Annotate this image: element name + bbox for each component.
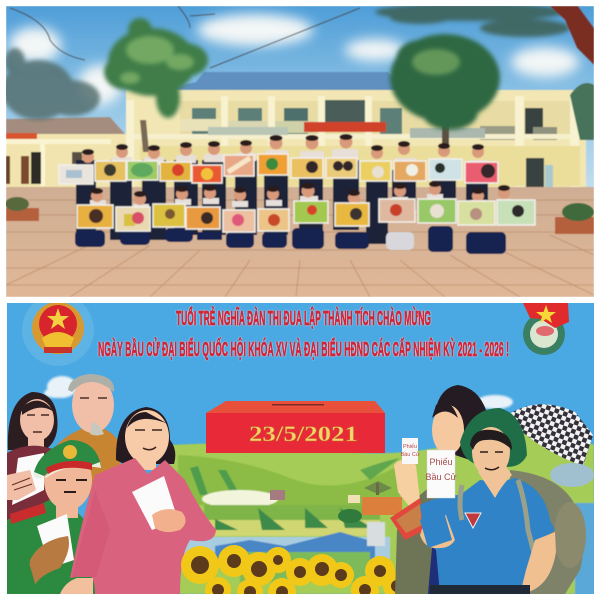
left green tree [104,18,208,152]
ballot box with date [206,401,385,453]
kneeling painting details [89,204,524,226]
kneeling students row [75,181,511,254]
sky with clouds [6,6,594,196]
figure: young man in blue shirt with green hat [420,408,556,594]
planter boxes [5,197,594,234]
date: 23/5/2021 [249,421,358,446]
figure: young woman with ballot [390,385,486,594]
figure: woman on the left [7,392,58,530]
figure: old man [50,374,120,495]
sunflowers left group [181,545,354,594]
standing row paintings [59,154,498,184]
upper right canopy and red trunk [375,3,594,140]
checkered flag [511,404,593,466]
figure: young man in blue shirt with green hat: Bầu Cử [425,472,457,482]
school building [126,72,586,195]
courtyard tiles [6,187,594,297]
standing students row [76,134,488,244]
figure: young woman with ballot: Bầu Cử [401,451,420,458]
figure: woman in pink ao dai [60,407,216,594]
ballot text large: Phiếu [429,457,453,467]
kneeling row paintings [77,199,535,232]
ballot text small: Phiếu [403,444,417,450]
photo: students holding paintings in front of school [2,3,594,297]
standing painting details [66,158,495,180]
backpack [510,463,594,594]
sunflowers right group [351,556,396,594]
small village and tower [270,481,402,523]
figure: officer in green uniform [7,440,101,594]
poster sky [7,303,594,594]
icon: national emblem [22,303,94,366]
low side building [6,117,126,188]
poster: election day banner [7,294,594,600]
right green tree [390,34,500,145]
icon: youth union badge [523,303,569,355]
clouds [44,376,513,409]
branches and wire [10,6,360,68]
green hills and fields [170,431,594,594]
left dark tree [2,48,100,120]
